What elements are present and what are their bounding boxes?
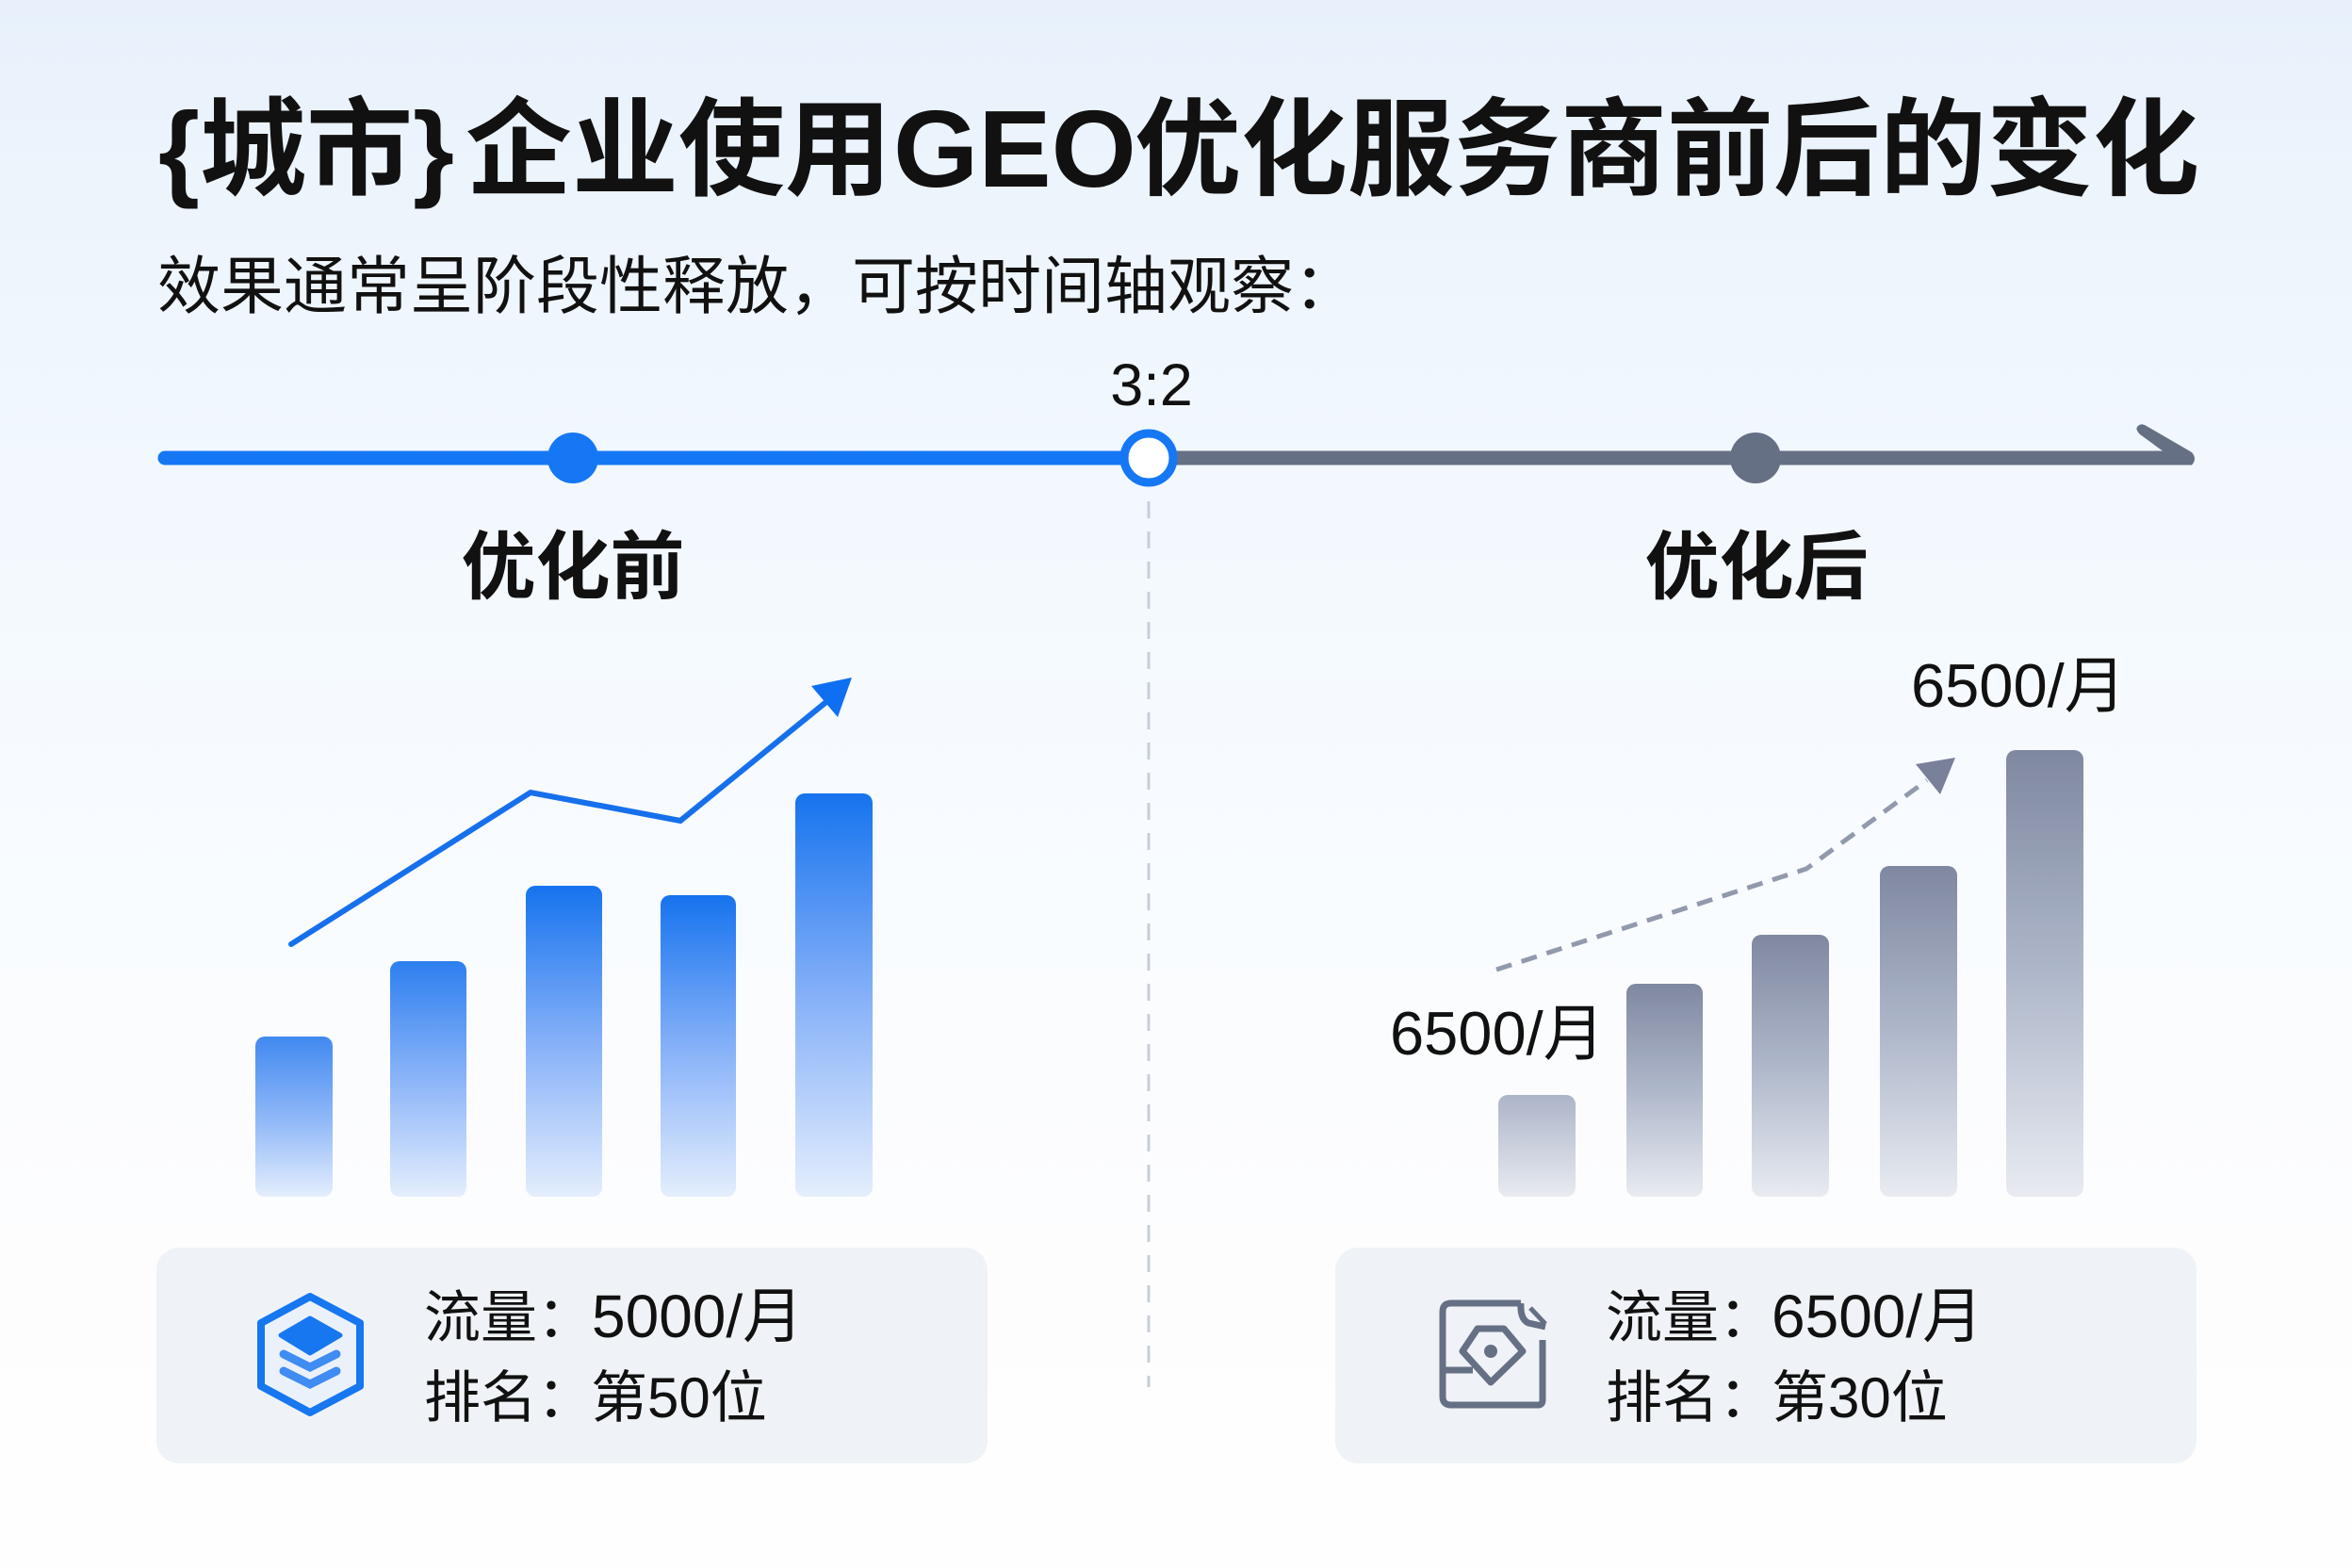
- trend arrow: before: [291, 678, 852, 944]
- timeline: [165, 352, 2195, 483]
- metric text: before: 5000/月: [592, 1282, 803, 1350]
- vertical dashed divider: [1148, 501, 1150, 1387]
- metric text: before: [424, 1282, 803, 1429]
- metric text: after: 6500/月: [1772, 1282, 1983, 1350]
- metric text: before: 排名：: [424, 1366, 594, 1429]
- trend arrow: after: [1496, 758, 1955, 970]
- heading: after: 优化后: [1645, 525, 1868, 609]
- title: {城市}: [158, 90, 454, 209]
- ratio label: 3:2: [1110, 352, 1193, 418]
- timeline: before segment: [165, 450, 1149, 466]
- timeline node: midpoint: [1124, 433, 1173, 482]
- bar chart: after: [1390, 651, 2126, 1197]
- metric text: before: 流量：: [424, 1286, 594, 1349]
- title: 企业使用: [466, 90, 891, 209]
- bar chart: before: [255, 678, 873, 1197]
- metric text: after: 排名：: [1606, 1366, 1775, 1429]
- title: GEO: [893, 88, 1136, 210]
- timeline node: after: [1730, 433, 1781, 483]
- title: 优化服务商前后的变化: [1135, 90, 2199, 209]
- metric text: after: 流量：: [1606, 1286, 1775, 1349]
- panel: before metrics: [156, 1248, 988, 1463]
- icon: stacked layers hexagon: [261, 1297, 360, 1413]
- value label: start: 6500/月: [1390, 999, 1605, 1068]
- icon: document with pen nib: [1443, 1303, 1545, 1405]
- heading: before: 优化前: [462, 525, 684, 609]
- subtitle: 效果通常呈阶段性释放，可按时间轴观察：: [157, 252, 1357, 322]
- metric text: before: 第50位: [591, 1366, 767, 1429]
- metric text: after: 第30位: [1772, 1366, 1948, 1429]
- timeline node: before: [547, 433, 598, 483]
- timeline: after segment with arrow: [1149, 424, 2195, 466]
- value label: end: 6500/月: [1911, 651, 2126, 720]
- metric text: after: [1606, 1282, 1983, 1429]
- panel: after metrics: [1335, 1248, 2197, 1463]
